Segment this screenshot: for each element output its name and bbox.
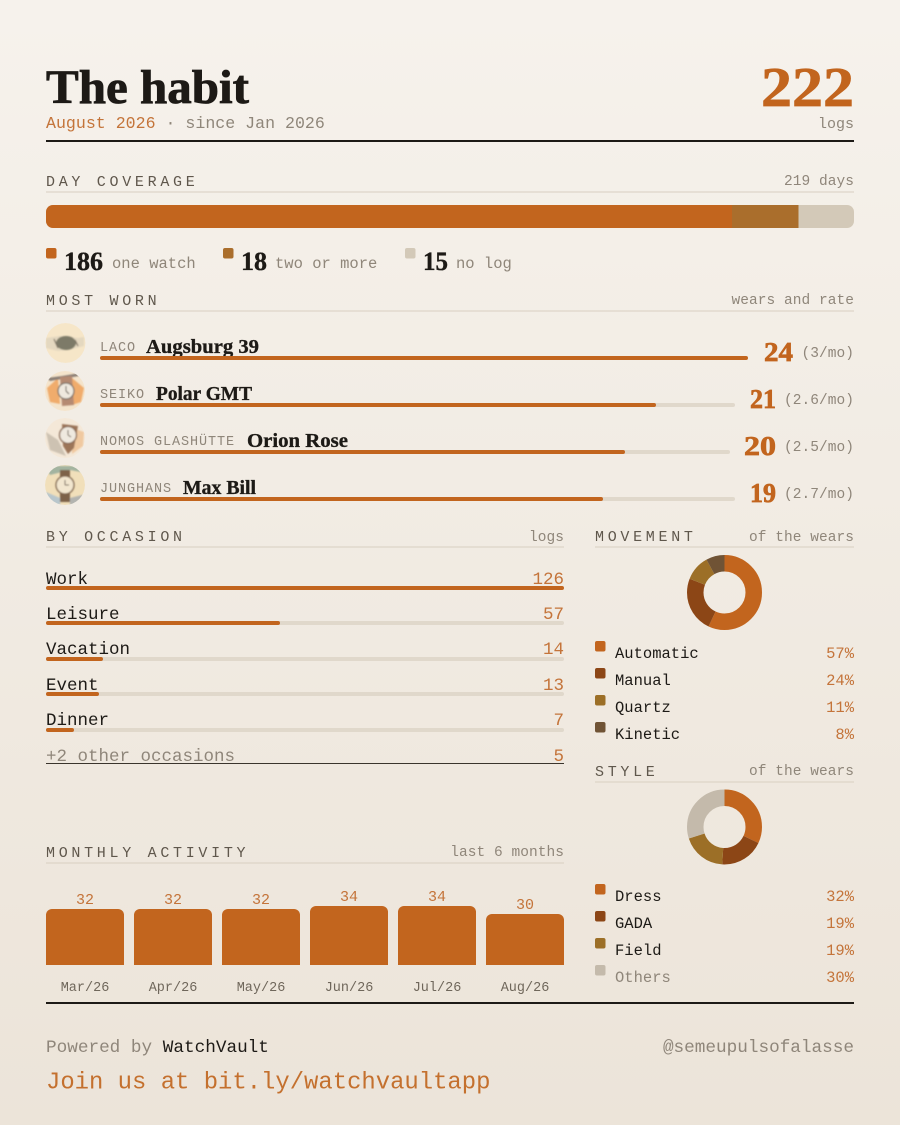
row: Work: Work <box>46 570 88 590</box>
note: of the wears: of the wears <box>749 530 854 546</box>
legend: Others: Others <box>615 969 671 987</box>
legend: Automatic: Automatic <box>615 645 699 663</box>
footer <box>46 1038 854 1096</box>
legend: two or more <box>223 247 377 276</box>
legend: Automatic: 57% <box>826 645 855 663</box>
legend: one watch: 186 <box>64 247 103 276</box>
bar chart: Aug/26 <box>501 981 549 996</box>
total logs label: logs <box>818 116 854 133</box>
bar chart: Jun/26 <box>325 981 373 996</box>
row: Nomos Orion Rose: Orion Rose <box>247 430 348 452</box>
row: Work <box>46 570 564 590</box>
legend: Manual: Manual <box>615 672 671 690</box>
legend: Kinetic: 8% <box>835 726 855 744</box>
note: wears and rate: wears and rate <box>731 293 854 309</box>
legend: Kinetic <box>595 722 855 744</box>
bar chart: Jul/26 <box>413 981 461 996</box>
legend: Quartz: 11% <box>826 699 855 717</box>
row: Nomos Orion Rose <box>45 418 854 461</box>
bar chart: Apr/26 <box>149 981 197 996</box>
label: SEIKO <box>100 388 145 403</box>
panel: style <box>595 764 855 987</box>
icon: watch Laco <box>46 323 86 363</box>
bar chart: 32 <box>164 892 182 909</box>
subtitle: August 2026 · since Jan 2026 <box>46 114 325 133</box>
row: Junghans Max Bill <box>45 465 854 508</box>
bar <box>100 497 735 501</box>
legend: Quartz: Quartz <box>615 699 671 717</box>
note: last 6 months: last 6 months <box>450 845 564 861</box>
panel: day coverage <box>46 174 854 276</box>
row: Leisure <box>46 605 564 625</box>
row: other occasions <box>46 747 564 767</box>
row: Leisure: 57 <box>543 605 564 625</box>
legend: no log <box>405 247 512 276</box>
powered by: Powered by WatchVault <box>46 1038 269 1058</box>
bar <box>100 450 730 454</box>
label: NOMOS GLASHÜTTE <box>100 435 235 450</box>
row: Dinner: 7 <box>553 711 564 731</box>
legend: two or more: 18 <box>241 247 267 276</box>
row: other occasions: 5 <box>553 747 564 767</box>
total logs number: 222 <box>761 57 854 119</box>
legend: Others <box>595 965 855 987</box>
row: Seiko Polar GMT: (2.6/mo) <box>784 393 854 409</box>
legend: Dress: 32% <box>826 888 855 906</box>
value: 20 <box>744 431 776 461</box>
row: Laco Augsburg 39: (3/mo) <box>801 346 854 362</box>
panel: monthly activity <box>46 845 564 996</box>
legend: GADA: 19% <box>826 915 855 933</box>
stacked coverage bar <box>46 205 854 228</box>
row: Junghans Max Bill: Max Bill <box>183 477 256 499</box>
note: of the wears: of the wears <box>749 764 854 780</box>
row: Dinner <box>46 711 564 732</box>
row: Seiko Polar GMT: Polar GMT <box>156 383 252 405</box>
heading: day coverage: DAY COVERAGE <box>46 174 198 191</box>
heading: most worn: MOST WORN <box>46 293 160 310</box>
row: Event <box>46 676 564 696</box>
donut chart: style <box>695 798 754 856</box>
row: Vacation: 14 <box>543 640 564 660</box>
bar chart: 34 <box>340 889 358 906</box>
icon: watch Junghans <box>45 465 86 506</box>
handle: @semeupulsofalasse <box>663 1038 854 1058</box>
legend: one watch: one watch <box>112 255 196 273</box>
legend: Others: 30% <box>826 969 855 987</box>
legend: GADA <box>595 911 855 933</box>
legend: Dress <box>595 884 855 906</box>
bar <box>100 403 735 407</box>
label: JUNGHANS <box>100 482 172 497</box>
panel: most worn <box>45 293 854 508</box>
note: logs: logs <box>529 530 564 546</box>
icon: watch Seiko <box>45 371 85 411</box>
legend: Field: Field <box>615 942 662 960</box>
legend: one watch <box>46 247 196 276</box>
row: Vacation <box>46 640 564 661</box>
legend: GADA: GADA <box>615 915 653 933</box>
heading: by occasion: BY OCCASION <box>46 529 186 546</box>
legend: Field: 19% <box>826 942 855 960</box>
header <box>46 57 854 142</box>
value: 19 <box>750 478 776 508</box>
label: LACO <box>100 341 136 356</box>
legend: no log: 15 <box>423 247 448 276</box>
row: Event: 13 <box>543 676 564 696</box>
row: Laco Augsburg 39: Augsburg 39 <box>146 336 259 358</box>
legend: Manual <box>595 668 855 690</box>
row: Leisure: Leisure <box>46 605 120 625</box>
bar chart: 32 <box>252 892 270 909</box>
heading: movement: MOVEMENT <box>595 529 697 546</box>
donut chart: movement <box>695 563 754 622</box>
heading: style: STYLE <box>595 764 659 781</box>
legend: two or more: two or more <box>275 255 377 273</box>
legend: Field <box>595 938 855 960</box>
title: The habit <box>46 61 249 114</box>
row: Seiko Polar GMT <box>45 371 854 414</box>
note: days: 219 days <box>784 174 854 190</box>
legend: Dress: Dress <box>615 888 662 906</box>
row: Work: 126 <box>532 570 564 590</box>
legend: Automatic <box>595 641 855 663</box>
panel: by occasion <box>46 529 564 767</box>
row: Laco Augsburg 39 <box>46 323 854 367</box>
heading: monthly activity: MONTHLY ACTIVITY <box>46 845 249 862</box>
bar chart <box>46 889 564 996</box>
legend: Kinetic: Kinetic <box>615 726 680 744</box>
bar chart: 34 <box>428 889 446 906</box>
panel: movement <box>595 529 855 744</box>
row: Dinner: Dinner <box>46 711 109 731</box>
row: other occasions: +2 other occasions <box>46 747 235 767</box>
row: Vacation: Vacation <box>46 640 130 660</box>
value: 21 <box>750 384 776 414</box>
value: 24 <box>764 337 793 367</box>
legend: Manual: 24% <box>826 672 855 690</box>
icon: watch Nomos <box>45 418 85 458</box>
row: Junghans Max Bill: (2.7/mo) <box>784 487 854 503</box>
bar chart: May/26 <box>237 981 285 996</box>
legend: no log: no log <box>456 255 512 273</box>
row: Event: Event <box>46 676 99 696</box>
row: Nomos Orion Rose: (2.5/mo) <box>784 440 854 456</box>
bar chart: Mar/26 <box>61 981 109 996</box>
bar chart: 32 <box>76 892 94 909</box>
bar chart: 30 <box>516 897 534 914</box>
call to action: Join us at bit.ly/watchvaultapp <box>46 1070 490 1096</box>
bar <box>100 356 748 360</box>
legend: Quartz <box>595 695 855 717</box>
